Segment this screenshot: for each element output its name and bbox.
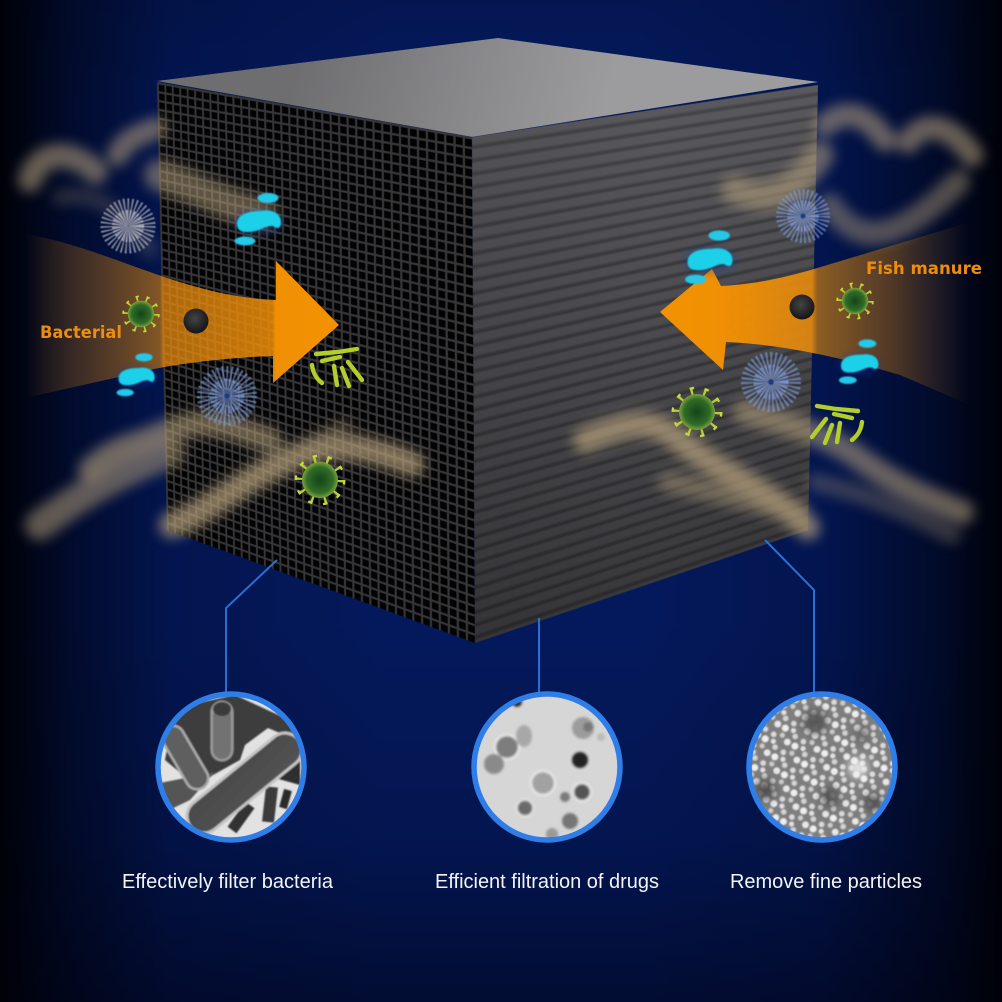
micrograph: fine particles: [750, 695, 894, 839]
caption: fine particles: Remove fine particles: [730, 871, 922, 893]
icon: spiky spores: [114, 202, 816, 411]
micrograph rings: [158, 694, 895, 840]
overlay illustration: [10, 96, 991, 892]
icon: green viruses: [123, 283, 873, 504]
label: Bacterial: Bacterial: [40, 323, 122, 343]
caption: filtration of drugs: Efficient filtration of drugs: [435, 871, 659, 893]
smoke wisps: right: [585, 115, 972, 535]
micrograph: bacteria: [150, 695, 308, 839]
micrograph: drugs: [475, 695, 619, 840]
icon: yellow-green rods: [312, 349, 862, 443]
connector lines: [226, 540, 814, 692]
icon: black particles: [184, 294, 814, 334]
cube: right ribbed face: [472, 85, 818, 643]
cube: front honeycomb face: [157, 82, 475, 643]
arrow: right, orange pointing left: [660, 222, 970, 405]
icon: cyan microbes: [115, 193, 882, 396]
label: Fish manure: Fish manure: [866, 259, 982, 279]
smoke wisps: left: [30, 128, 412, 525]
arrow: left, orange pointing right: [25, 234, 339, 398]
caption: filter bacteria: Effectively filter bacteria: [122, 871, 334, 893]
